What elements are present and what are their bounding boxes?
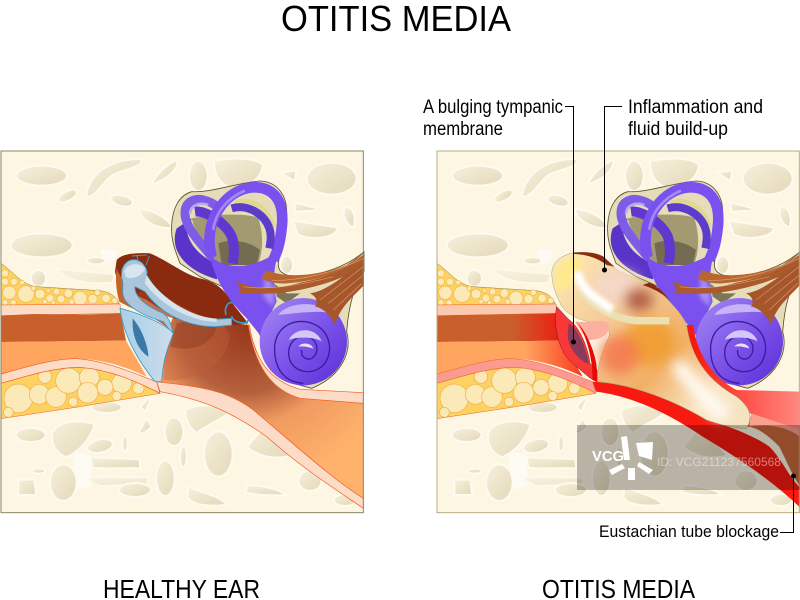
fluid build-up in middle ear [552,252,750,428]
label: eustachian tube blockage [599,474,796,541]
watermark logo [609,436,653,480]
label: eustachian tube blockage: Eustachian tube blockage [599,522,779,541]
panel border [1,151,363,513]
inner ear: semicircular canals and cochlea [172,181,364,388]
label: bulging tympanic membrane: A bulging tympanic [423,97,563,118]
panel: otitis media ear [437,151,800,513]
middle ear and eustachian tube [115,253,363,508]
label: bulging tympanic membrane: membrane [423,119,503,140]
inner ear: semicircular canals and cochlea [608,181,800,388]
fat tissue [1,263,160,419]
bone background [437,151,799,513]
label: bulging tympanic membrane [423,97,576,344]
panel: healthy ear [1,151,364,513]
watermark wordmark: VCG [592,448,624,465]
bulging tympanic membrane [556,307,597,382]
ear canal [1,304,160,393]
ossicles and tympanic membrane [120,255,248,382]
bone background [1,151,363,513]
watermark band [577,425,800,490]
label: inflammation and fluid build-up: Inflammation and [628,97,763,118]
inflamed ear canal [437,304,596,393]
watermark id: ID: VCG211237560568 [657,455,781,469]
inflamed lining and red tube [593,325,800,508]
panel border [437,151,799,513]
label: inflammation and fluid build-up [602,97,763,272]
fat tissue [437,263,596,419]
label: inflammation and fluid build-up: fluid build-up [628,119,728,140]
